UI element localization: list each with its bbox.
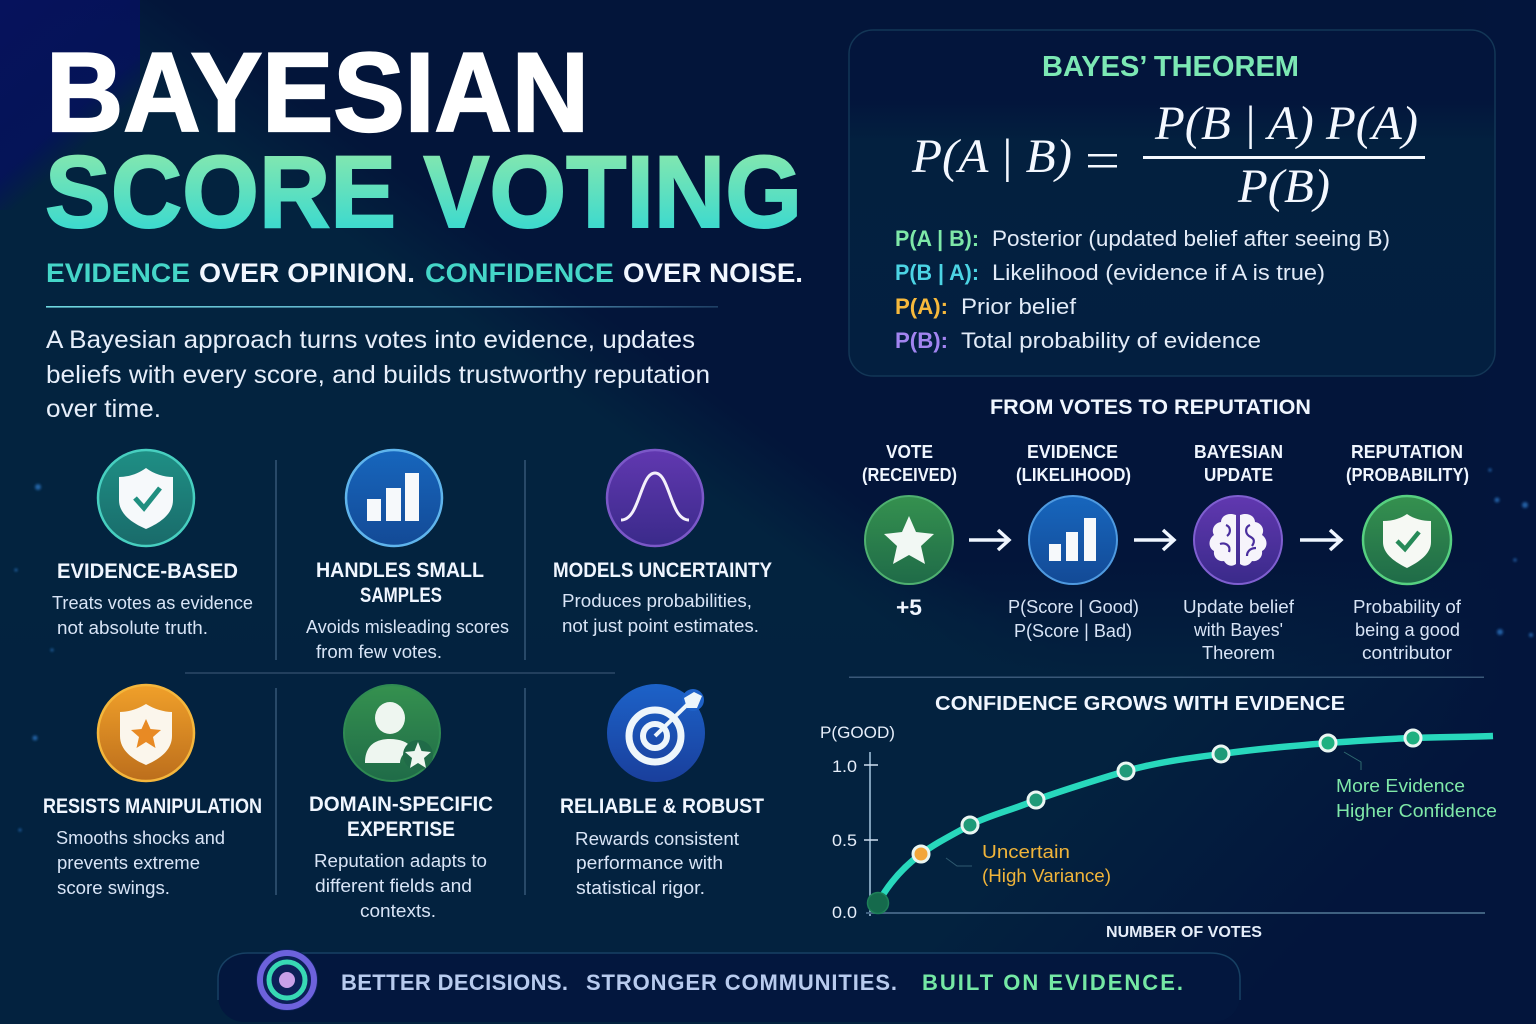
feature: domain-specific expertise: EXPERTISE [347, 818, 455, 841]
title [45, 30, 802, 249]
axes: 1.0 [832, 757, 857, 776]
legend: Posterior (updated belief after seeing B) [992, 226, 1390, 251]
step: reputation [1346, 442, 1469, 663]
feature: reliable and robust: Rewards consistent [575, 828, 739, 849]
step: vote: VOTE [886, 442, 933, 462]
legend: P(A | B): [895, 226, 979, 251]
intro paragraph [46, 326, 710, 423]
feature: domain-specific expertise: DOMAIN-SPECIFIC [309, 793, 493, 816]
step: reputation: Probability of [1353, 596, 1462, 617]
step: evidence: EVIDENCE [1027, 442, 1118, 462]
feature: evidence-based: not absolute truth. [57, 617, 208, 638]
footer banner: BETTER DECISIONS. [341, 970, 568, 995]
formula: P(A | B) [911, 130, 1072, 183]
step: Bayesian update: UPDATE [1204, 465, 1273, 485]
footer banner: BUILT ON EVIDENCE. [922, 970, 1183, 995]
formula: P(B | A) P(A) [1154, 97, 1418, 150]
process flow: from votes to reputation [862, 396, 1469, 663]
formula: P(B) [1237, 160, 1330, 213]
callout: more evidence [1336, 752, 1497, 821]
legend: Total probability of evidence [961, 328, 1261, 353]
tagline [46, 258, 803, 288]
intro paragraph: A Bayesian approach turns votes into evidence, updates [46, 326, 695, 354]
step: reputation: (PROBABILITY) [1346, 465, 1469, 485]
feature: models uncertainty: MODELS UNCERTAINTY [553, 559, 772, 582]
arrow [1300, 530, 1341, 550]
step: vote [862, 442, 957, 620]
feature: resists manipulation: score swings. [57, 877, 170, 898]
step: Bayesian update: BAYESIAN [1194, 442, 1283, 462]
footer banner: STRONGER COMMUNITIES. [586, 970, 897, 995]
panel: Bayes' theorem [849, 30, 1495, 376]
feature: handles small samples: HANDLES SMALL [316, 559, 484, 582]
data points [868, 730, 1421, 914]
title: SCORE VOTING [45, 135, 802, 249]
feature: resists manipulation: prevents extreme [57, 852, 200, 873]
legend: P(B | A): [895, 260, 979, 285]
legend: Prior belief [961, 294, 1077, 319]
icon: footer target [256, 949, 318, 1011]
icon: bell curve [607, 450, 703, 546]
intro paragraph: beliefs with every score, and builds trustworthy reputation [46, 361, 710, 389]
step: Bayesian update [1183, 442, 1295, 663]
intro paragraph: over time. [46, 395, 161, 423]
feature: resists manipulation: Smooths shocks and [56, 827, 225, 848]
callout: more evidence: More Evidence [1336, 775, 1465, 796]
arrow [969, 530, 1009, 550]
footer banner [218, 949, 1240, 1022]
legend [895, 226, 1390, 353]
feature: evidence-based: EVIDENCE-BASED [57, 560, 238, 583]
step: reputation: REPUTATION [1351, 442, 1463, 462]
axes: 0.0 [832, 903, 857, 922]
callout: more evidence: Higher Confidence [1336, 800, 1497, 821]
feature: models uncertainty: Produces probabilities, [562, 590, 752, 611]
callout: uncertain: Uncertain [982, 841, 1070, 862]
feature: evidence-based: Treats votes as evidence [52, 592, 253, 613]
heading: FROM VOTES TO REPUTATION [990, 396, 1311, 419]
step: vote: (RECEIVED) [862, 465, 957, 485]
icon: bar chart [346, 450, 442, 546]
feature: reliable and robust [560, 684, 764, 898]
legend: P(B): [895, 328, 948, 353]
step: evidence: (LIKELIHOOD) [1016, 465, 1131, 485]
heading: BAYES’ THEOREM [1042, 51, 1299, 83]
feature: domain-specific expertise: contexts. [360, 900, 436, 921]
step: vote: +5 [896, 595, 922, 620]
icon: person with star [344, 685, 440, 781]
chart: confidence grows with evidence [820, 693, 1497, 941]
feature: domain-specific expertise [309, 685, 493, 921]
legend: Likelihood (evidence if A is true) [992, 260, 1325, 285]
icon: shield star [98, 685, 194, 781]
feature: models uncertainty [553, 450, 772, 636]
axes: NUMBER OF VOTES [1106, 924, 1262, 941]
formula [911, 97, 1425, 213]
tagline: OVER OPINION. [199, 258, 415, 288]
step: evidence: P(Score | Good) [1008, 596, 1139, 617]
arrow [1134, 530, 1174, 550]
feature: evidence-based [52, 450, 253, 638]
tagline: OVER NOISE. [623, 258, 803, 288]
step: Bayesian update: with Bayes' [1193, 619, 1283, 640]
feature: handles small samples [306, 450, 509, 662]
step: reputation: being a good [1355, 619, 1460, 640]
feature: handles small samples: SAMPLES [360, 584, 442, 607]
feature: domain-specific expertise: Reputation adapts to [314, 850, 487, 871]
icon: shield check [98, 450, 194, 546]
curve [878, 736, 1493, 903]
step: reputation: contributor [1362, 642, 1452, 663]
axes [820, 723, 1485, 941]
feature: reliable and robust: statistical rigor. [576, 877, 705, 898]
tagline: CONFIDENCE [425, 258, 614, 288]
legend: P(A): [895, 294, 948, 319]
axes: P(GOOD) [820, 723, 895, 742]
feature: models uncertainty: not just point estimates. [562, 615, 759, 636]
icon: brain [1210, 514, 1266, 566]
callout: uncertain: (High Variance) [982, 865, 1111, 886]
feature: resists manipulation: RESISTS MANIPULATION [43, 795, 262, 818]
feature: resists manipulation [43, 685, 262, 898]
feature: reliable and robust: performance with [576, 852, 723, 873]
step: Bayesian update: Update belief [1183, 596, 1295, 617]
heading: CONFIDENCE GROWS WITH EVIDENCE [935, 693, 1345, 715]
step: evidence [1008, 442, 1139, 641]
step: evidence: P(Score | Bad) [1014, 620, 1132, 641]
feature: domain-specific expertise: different fields and [315, 875, 472, 896]
callout: uncertain [946, 841, 1111, 886]
icon: target with arrow [607, 684, 705, 782]
step: Bayesian update: Theorem [1202, 642, 1275, 663]
feature: handles small samples: from few votes. [316, 641, 442, 662]
tagline: EVIDENCE [46, 258, 190, 288]
axes: 0.5 [832, 831, 857, 850]
feature: reliable and robust: RELIABLE & ROBUST [560, 795, 764, 818]
feature: handles small samples: Avoids misleading scores [306, 616, 509, 637]
title: BAYESIAN [46, 30, 589, 155]
